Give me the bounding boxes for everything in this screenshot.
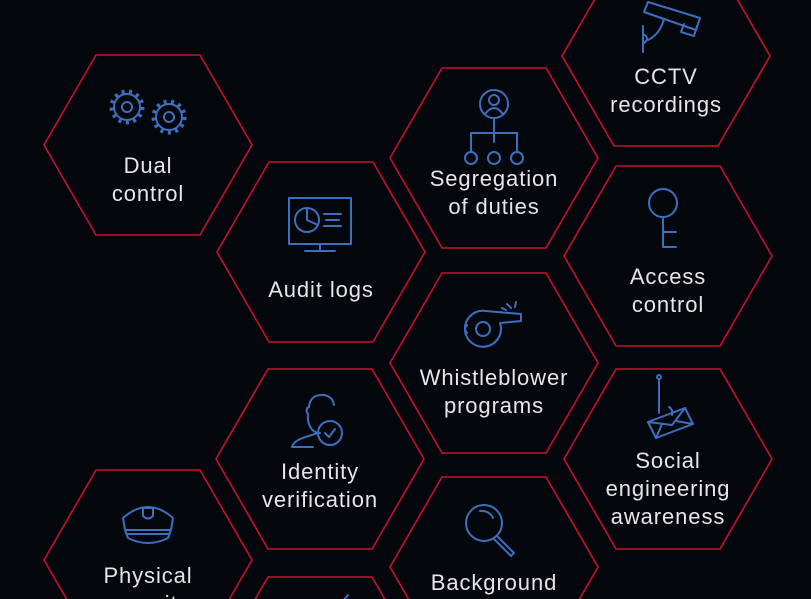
hex: whistleblower: programs [444, 393, 544, 418]
hex: social engineering: awareness [611, 504, 725, 529]
hex: identity verification: verification [262, 487, 378, 512]
icon: whistle [465, 302, 521, 347]
hex: identity verification [216, 369, 424, 549]
hex: dual control: Dual [124, 153, 172, 178]
hex: access control: Access [630, 264, 706, 289]
icon: phishing envelope [648, 375, 693, 438]
hex: audit logs: Audit logs [268, 277, 374, 302]
icon: key [649, 189, 677, 247]
hex: background checks: Background [431, 570, 557, 595]
icon: gears [112, 92, 184, 132]
hex: dual control: control [112, 181, 184, 206]
hex: physical security [44, 470, 252, 599]
hex: dual control [44, 55, 252, 235]
hex: cctv: CCTV [634, 64, 698, 89]
icon: org chart [465, 90, 523, 164]
hex: segregation of duties: of duties [448, 194, 540, 219]
icon: partial [344, 595, 348, 599]
hex: access control [564, 166, 772, 346]
hex: whistleblower: Whistleblower [420, 365, 568, 390]
hex: segregation of duties: Segregation [430, 166, 558, 191]
icon: magnifier [466, 505, 514, 556]
hex: physical security: Physical [103, 563, 193, 588]
hex: partial bottom [254, 576, 386, 599]
icon: user with check [292, 395, 342, 447]
icon: camera [643, 2, 700, 52]
hex: audit logs [217, 162, 425, 342]
icon: monitor [289, 198, 351, 251]
hex: background checks [390, 477, 598, 599]
hex: social engineering [564, 369, 772, 549]
hex: cctv [562, 0, 770, 146]
hex: access control: control [632, 292, 704, 317]
hex: segregation of duties [390, 68, 598, 248]
hex: social engineering: engineering [606, 476, 730, 501]
hex: identity verification: Identity [281, 459, 359, 484]
icon: police hat [123, 507, 173, 543]
hex: cctv: recordings [610, 92, 722, 117]
hex: whistleblower [390, 273, 598, 453]
hex: social engineering: Social [635, 448, 701, 473]
